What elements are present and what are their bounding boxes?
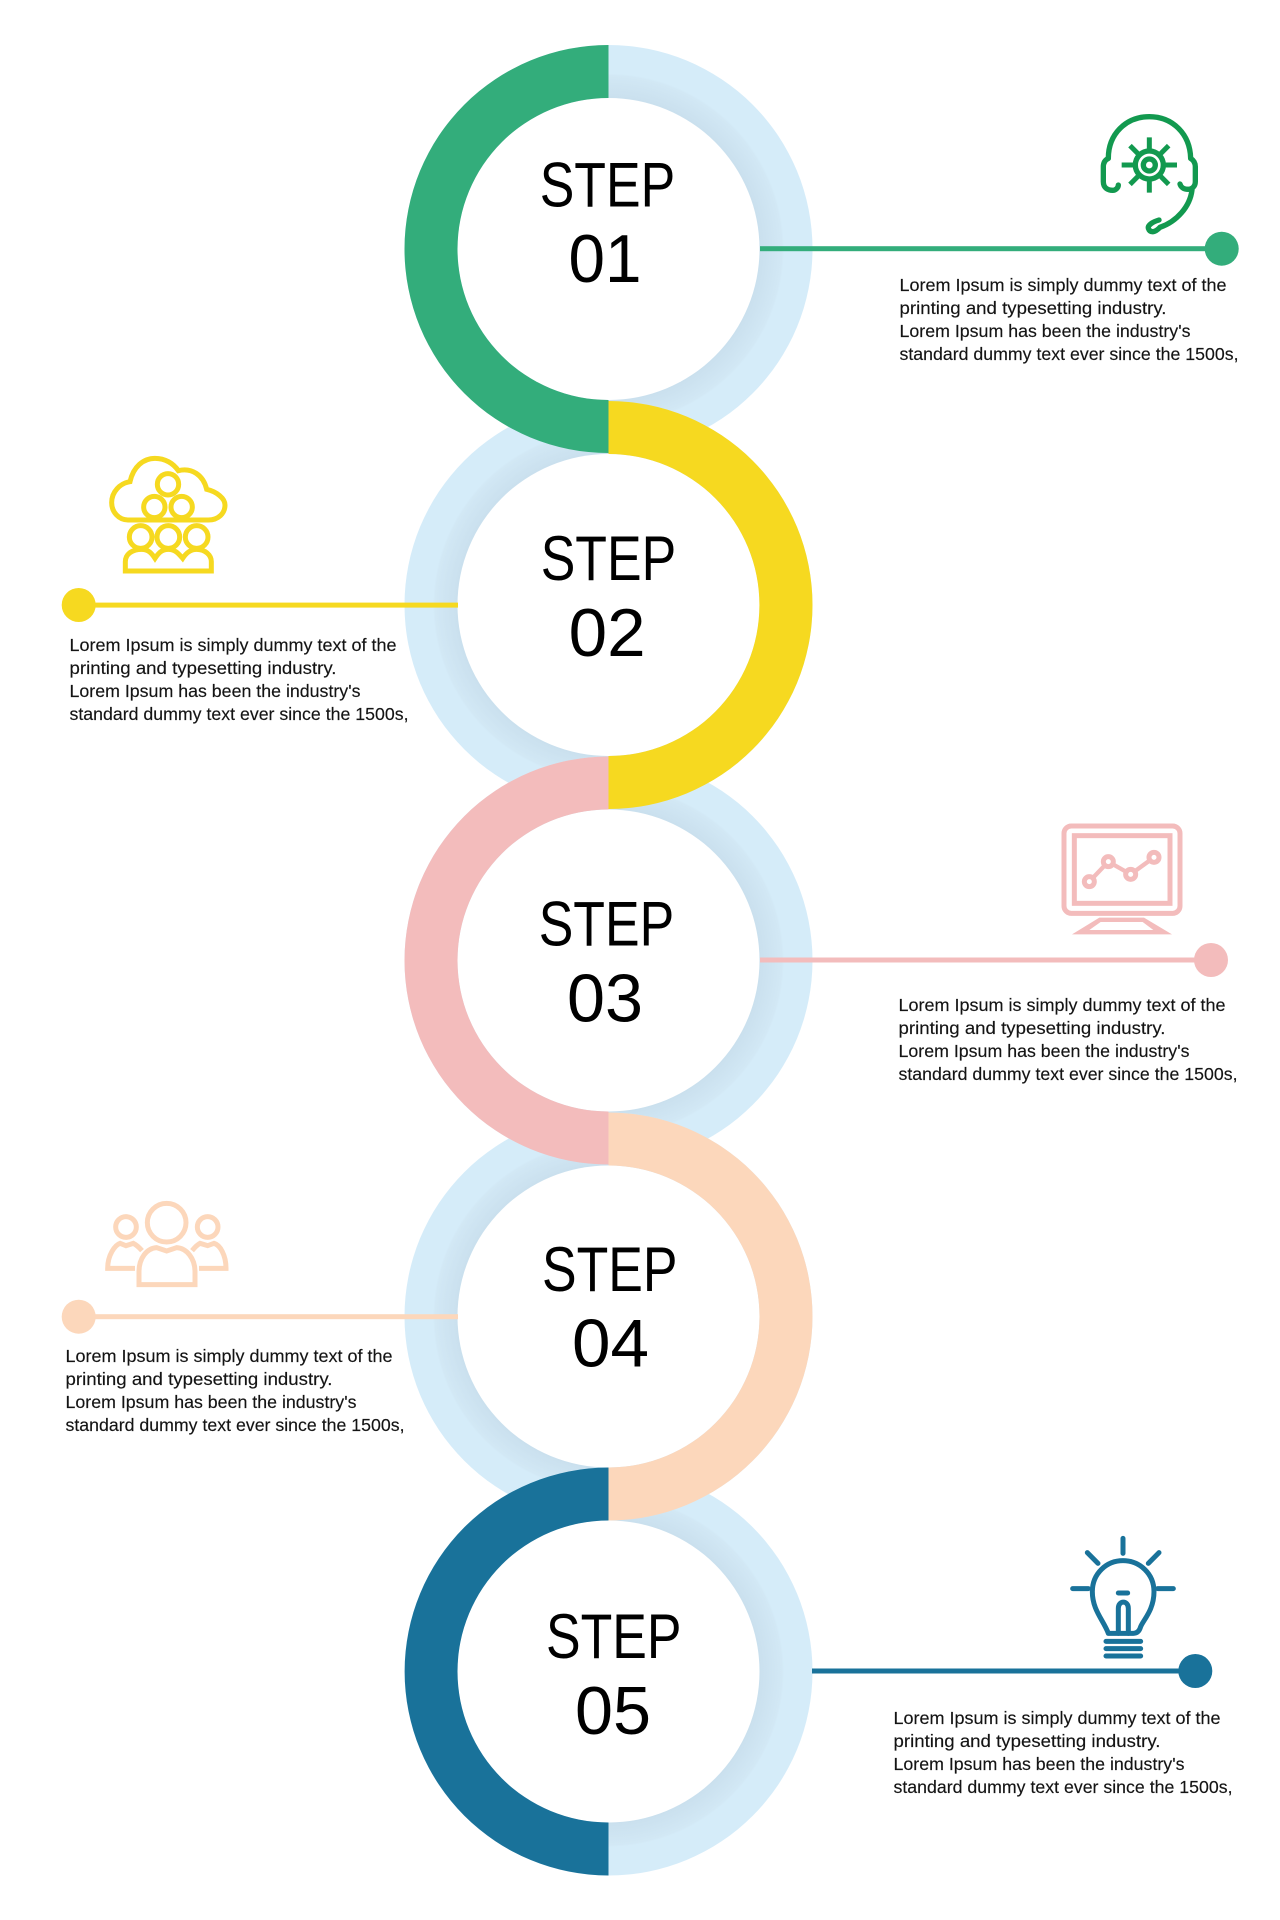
step 04 label [542, 1235, 678, 1382]
text block step 5 [894, 1708, 1232, 1797]
text block step 4: printing and typesetting industry. [66, 1369, 332, 1389]
text block step 2: printing and typesetting industry. [70, 658, 336, 678]
step 03 label [539, 890, 674, 1037]
icon: group of three people [108, 1203, 226, 1285]
text block step 1: Lorem Ipsum is simply dummy text of the [900, 275, 1226, 295]
connector step 1 [760, 232, 1239, 266]
step 01 label: 01 [568, 221, 642, 297]
text block step 5: standard dummy text ever since the 1500s, [894, 1777, 1232, 1797]
connector step 3 [760, 943, 1228, 977]
text block step 3 [898, 995, 1238, 1084]
step 2 yellow half ring [608, 401, 812, 809]
step 02 label: STEP [541, 524, 676, 594]
step 04 label: STEP [542, 1235, 678, 1305]
step 05 label: 05 [575, 1673, 651, 1749]
step 05 label [546, 1602, 682, 1749]
connector step 4 [62, 1300, 458, 1334]
icon: headset with gear [1103, 117, 1195, 232]
text block step 2 [70, 635, 408, 724]
text block step 3: Lorem Ipsum has been the industry's [898, 1041, 1190, 1061]
text block step 2: standard dummy text ever since the 1500s, [70, 704, 408, 724]
text block step 1: Lorem Ipsum has been the industry's [900, 321, 1191, 341]
text block step 1: printing and typesetting industry. [900, 298, 1166, 318]
text block step 2: Lorem Ipsum is simply dummy text of the [70, 635, 396, 655]
step 05 label: STEP [546, 1602, 682, 1672]
pale blue background rings [404, 45, 812, 1876]
step 02 label [541, 524, 676, 671]
text block step 5: Lorem Ipsum is simply dummy text of the [894, 1708, 1220, 1728]
text block step 3: Lorem Ipsum is simply dummy text of the [898, 995, 1226, 1015]
connector step 2 [62, 588, 458, 622]
step 01 label [540, 151, 675, 297]
step 3 pink half ring [404, 756, 608, 1164]
icon: monitor with line chart [1064, 826, 1180, 934]
text block step 2: Lorem Ipsum has been the industry's [70, 681, 361, 701]
step 03 label: STEP [539, 890, 674, 960]
text block step 1: standard dummy text ever since the 1500s, [900, 344, 1238, 364]
text block step 4: Lorem Ipsum is simply dummy text of the [66, 1346, 392, 1366]
text block step 4: Lorem Ipsum has been the industry's [66, 1392, 357, 1412]
step 04 label: 04 [572, 1306, 649, 1382]
step 01 label: STEP [540, 151, 675, 221]
icon: light bulb [1073, 1538, 1173, 1656]
step 02 label: 02 [569, 595, 646, 671]
text block step 5: Lorem Ipsum has been the industry's [894, 1754, 1185, 1774]
connector step 5 [812, 1654, 1212, 1688]
step 4 peach half ring [608, 1112, 812, 1520]
text block step 4: standard dummy text ever since the 1500s, [66, 1415, 404, 1435]
step 03 label: 03 [567, 961, 643, 1037]
text block step 1 [900, 275, 1238, 364]
text block step 3: printing and typesetting industry. [898, 1018, 1166, 1038]
step 5 blue half ring [405, 1468, 608, 1876]
icon: people and cloud [112, 458, 225, 571]
step 1 green half ring [404, 45, 608, 453]
white inner discs [458, 98, 760, 1822]
text block step 5: printing and typesetting industry. [894, 1731, 1160, 1751]
text block step 4 [66, 1346, 404, 1435]
text block step 3: standard dummy text ever since the 1500s, [898, 1064, 1238, 1084]
